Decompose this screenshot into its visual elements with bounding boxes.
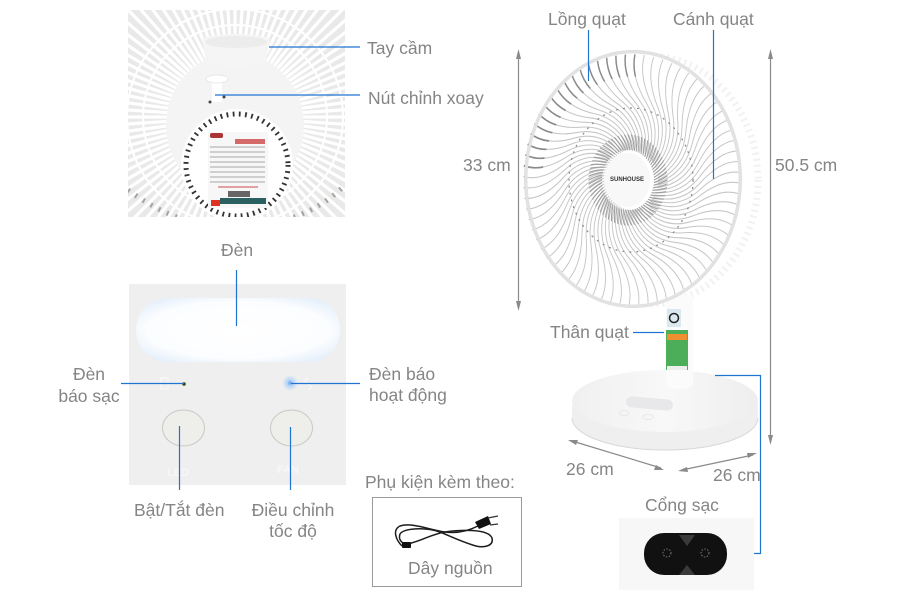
icon: LED button <box>162 410 204 446</box>
printed labels: LED <box>167 467 189 479</box>
brand: SUNHOUSE <box>610 177 644 183</box>
label: Điều chỉnh tốc độ: tốc độ <box>269 521 317 541</box>
arrow: 26 cm right: 26 cm <box>713 465 761 485</box>
panel: control panel photo <box>129 284 346 485</box>
icon: fan head <box>523 50 742 308</box>
icon: faint symbols <box>161 378 311 390</box>
label: Đèn báo sạc <box>58 364 184 406</box>
icon: fan rear rim <box>542 56 758 304</box>
arrow: 33 cm: 33 cm <box>463 155 511 175</box>
arrow: 26 cm right <box>678 453 761 485</box>
icon: hub <box>604 153 650 207</box>
label: Bật/Tắt đèn <box>134 426 224 520</box>
arrow: 26 cm left <box>566 440 664 479</box>
printed labels <box>167 464 299 479</box>
icon: power cord <box>396 516 498 548</box>
label: Thân quạt: Thân quạt <box>550 322 629 342</box>
label: Đèn báo hoạt động: hoạt động <box>369 385 447 405</box>
label: Điều chỉnh tốc độ: Điều chỉnh <box>252 500 334 520</box>
icon: fan base <box>572 370 758 450</box>
arrow: 33 cm <box>463 49 521 311</box>
arrow: 26 cm left: 26 cm <box>566 459 614 479</box>
icon: fan stem <box>666 295 694 390</box>
fan blades <box>502 30 762 330</box>
label: Đèn báo sạc: Đèn <box>73 364 105 384</box>
icon: spec sticker <box>208 132 268 208</box>
pointer: lamp <box>236 270 238 326</box>
label: Tay cầm: Tay cầm <box>367 38 432 58</box>
panel: charging port photo <box>619 518 754 590</box>
label: Điều chỉnh tốc độ <box>252 427 334 541</box>
icon: activity LED <box>282 375 298 391</box>
label: Đèn báo sạc: báo sạc <box>58 386 120 406</box>
pointer: base to charging port <box>715 376 760 554</box>
label: Nút chỉnh xoay: Nút chỉnh xoay <box>368 88 484 108</box>
label: Đèn báo hoạt động: Đèn báo <box>369 364 435 384</box>
label: Đèn báo hoạt động <box>291 364 447 405</box>
icon: energy label <box>666 330 688 374</box>
label: Cánh quạt: Cánh quạt <box>673 9 754 29</box>
label: Thân quạt <box>550 322 664 342</box>
icon: carry handle <box>202 34 270 60</box>
icon: fan motor housing <box>166 60 304 169</box>
label: Bật/Tắt đèn: Bật/Tắt đèn <box>134 499 224 520</box>
icon: QR sticker <box>667 309 681 327</box>
label: Lồng quạt <box>548 9 626 81</box>
icon: rear vent circle <box>181 109 293 221</box>
panel: accessory power cord <box>372 498 522 586</box>
icon: charging LED <box>182 382 186 386</box>
panel: fan back photo <box>128 10 345 217</box>
label: Đèn: Đèn <box>221 240 253 260</box>
label: Lồng quạt: Lồng quạt <box>548 9 626 29</box>
arrow: 50.5 cm <box>768 49 837 445</box>
label: Cổng sạc: Cổng sạc <box>645 495 719 515</box>
heading: accessories: Phụ kiện kèm theo: <box>365 472 515 492</box>
icon: lamp <box>136 298 340 362</box>
icon: fan button <box>270 410 312 446</box>
icon: oscillation knob <box>206 75 228 104</box>
arrow: 50.5 cm: 50.5 cm <box>775 155 837 175</box>
printed labels: FAN <box>277 464 299 476</box>
panel: accessory power cord: Dây nguồn <box>408 558 493 578</box>
icon: charging socket <box>644 533 727 575</box>
